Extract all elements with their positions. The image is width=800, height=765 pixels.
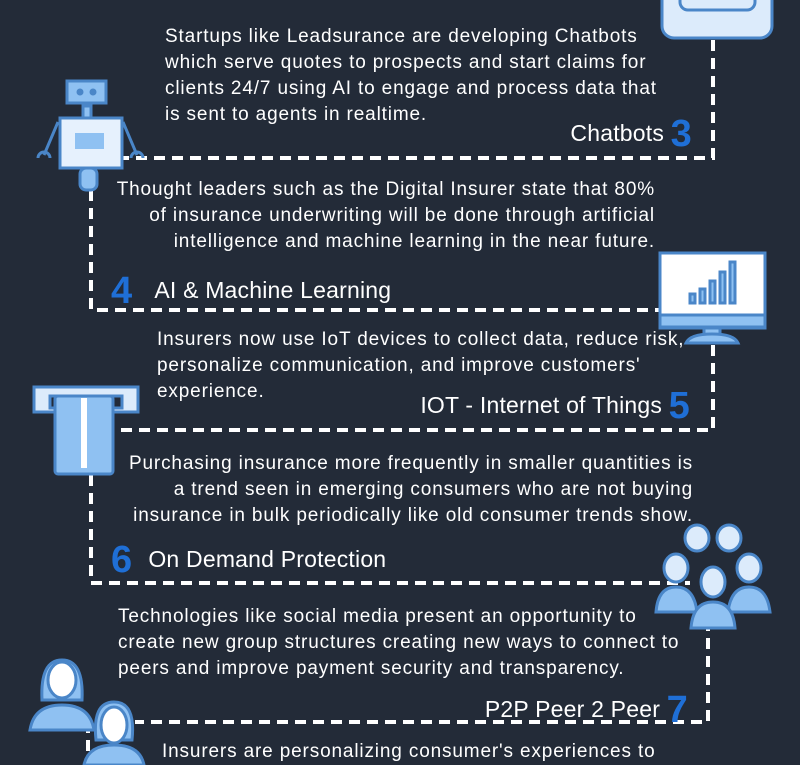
text: personalization: Insurers are personalizing consumer's experiences to (162, 741, 656, 762)
icon: two people (30, 660, 144, 765)
icon: robot head top (662, 0, 772, 38)
text: P2P (118, 606, 679, 679)
text: on demand: a trend seen in emerging consumers who are not buying (174, 479, 693, 500)
text: on demand: insurance in bulk periodically like old consumer trends show. (133, 505, 693, 526)
heading 7: P2P Peer 2 Peer 7 (485, 689, 688, 731)
text: P2P: create new group structures creating new ways to connect to (118, 632, 679, 653)
text: IoT: Insurers now use IoT devices to collect data, reduce risk, (157, 329, 684, 350)
text: AI: Thought leaders such as the Digital Insurer state that 80% (117, 179, 655, 200)
icon: monitor (660, 253, 765, 343)
text: chatbots: which serve quotes to prospects and start claims for (165, 52, 646, 73)
icon: robot (38, 81, 143, 190)
heading 3: Chatbots 3 (570, 113, 692, 155)
text: IoT: experience. (157, 381, 265, 402)
heading 6: 6 On Demand Protection (111, 539, 386, 581)
heading 4: 4 AI & Machine Learning (111, 270, 391, 312)
text: chatbots (165, 26, 657, 125)
text: IoT (157, 329, 684, 402)
text: IoT: personalize communication, and improve customers' (157, 355, 641, 376)
text: chatbots: clients 24/7 using AI to engage and process data that (165, 78, 657, 99)
text: chatbots: Startups like Leadsurance are developing Chatbots (165, 26, 638, 47)
text: AI: of insurance underwriting will be done through artificial (149, 205, 655, 226)
heading 5: IOT - Internet of Things 5 (420, 385, 690, 427)
text: P2P: peers and improve payment security and transparency. (118, 658, 624, 679)
text: P2P: Technologies like social media present an opportunity to (118, 606, 637, 627)
text: chatbots: is sent to agents in realtime. (165, 104, 427, 125)
text: on demand: Purchasing insurance more frequently in smaller quantities is (129, 453, 693, 474)
icon: group (656, 525, 770, 628)
text: AI (117, 179, 655, 252)
text: AI: intelligence and machine learning in the near future. (174, 231, 655, 252)
text: on demand (129, 453, 693, 526)
icon: card slot (34, 387, 138, 474)
